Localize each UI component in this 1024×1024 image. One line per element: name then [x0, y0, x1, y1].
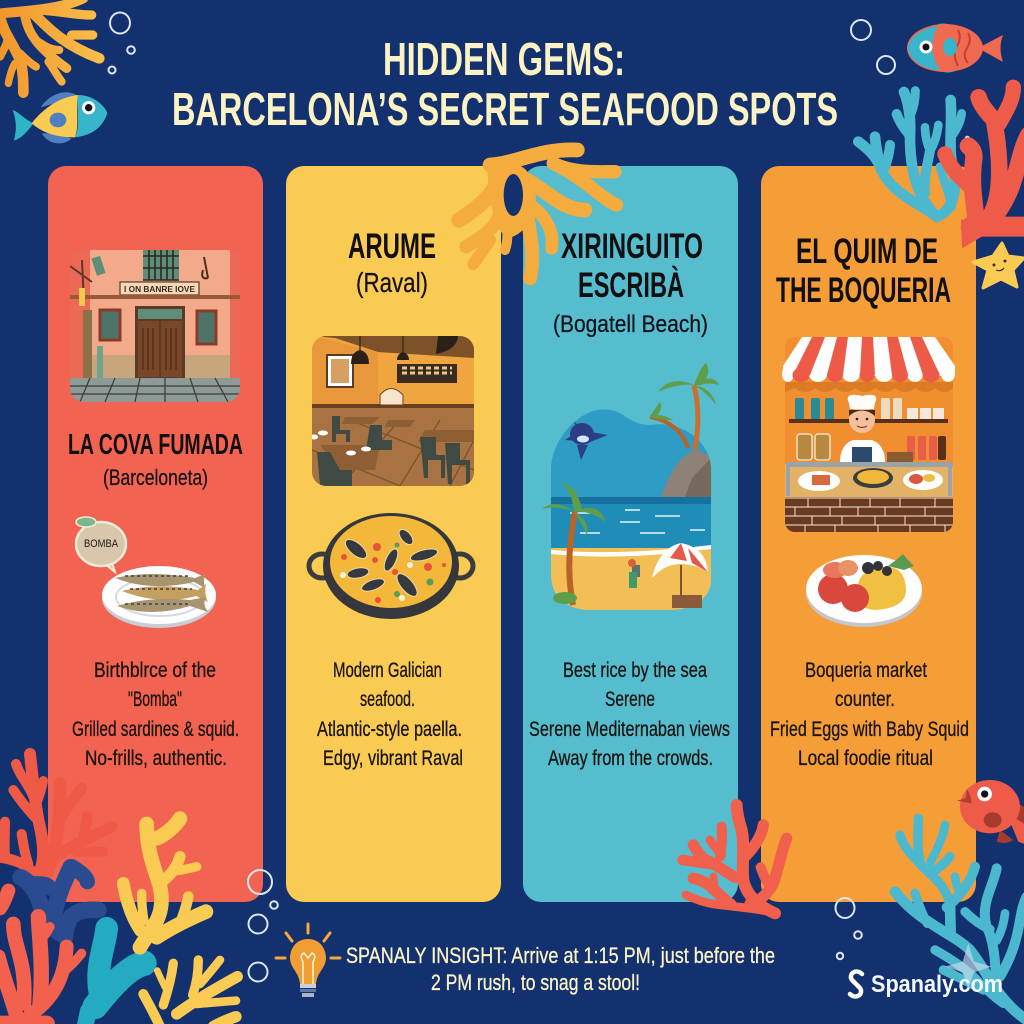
description: Boqueria market	[805, 659, 927, 682]
illustration: tavern facade: I ON BANRE IOVE	[124, 285, 196, 294]
fish: teal and red top right	[907, 23, 1003, 73]
description: No-frills, authentic.	[85, 747, 227, 770]
coral: top left orange	[0, 0, 99, 93]
card: Xiringuito Escribà background	[523, 166, 738, 902]
bubbles	[108, 12, 895, 982]
heading: El Quim de the Boqueria: EL QUIM DE	[796, 232, 938, 271]
description: Birthblrce of the	[94, 659, 216, 682]
card: La Cova Fumada background	[48, 166, 263, 902]
description: Atlantic-style paella.	[317, 718, 462, 741]
description	[529, 659, 730, 770]
insight callout: SPANALY INSIGHT: Arrive at 1:15 PM, just before the	[346, 943, 775, 968]
location: Bogatell Beach: (Bogatell Beach)	[553, 311, 708, 338]
illustration: tavern facade	[70, 250, 240, 402]
description: Edgy, vibrant Raval	[323, 747, 463, 770]
heading: La Cova Fumada: LA COVA FUMADA	[68, 429, 243, 461]
icon: star	[973, 243, 1024, 288]
title	[172, 33, 838, 135]
description: seafood.	[360, 688, 415, 711]
description: Serene	[605, 688, 655, 711]
illustration: beach scene	[542, 363, 719, 610]
coral: lower left teal	[85, 928, 144, 1024]
description	[72, 659, 239, 770]
heading: Xiringuito Escribà	[561, 227, 703, 305]
description: "Bomba"	[128, 688, 182, 711]
callout: Bomba: BOMBA	[84, 538, 119, 550]
description: Best rice by the sea	[563, 659, 707, 682]
description: counter.	[835, 688, 895, 711]
description: Serene Mediternaban views	[529, 718, 730, 741]
description	[317, 659, 463, 770]
icon: light bulb	[276, 924, 340, 997]
description: Local foodie ritual	[798, 747, 933, 770]
panel: El Quim de the Boqueria	[770, 232, 969, 770]
callout: Bomba	[76, 517, 126, 572]
coral: center bottom red	[683, 805, 787, 913]
heading: El Quim de the Boqueria	[776, 232, 951, 310]
coral: lower right blue	[895, 818, 1024, 1020]
heading: Xiringuito Escribà: XIRINGUITO	[561, 227, 703, 266]
coral: bottom yellow	[143, 960, 237, 1024]
description: Away from the crowds.	[548, 747, 713, 770]
icon: sardine plate	[102, 566, 216, 628]
description	[770, 659, 969, 770]
location: Barceloneta: (Barceloneta)	[103, 465, 208, 490]
description: Modern Galician	[333, 659, 442, 682]
coral: top right blue	[858, 91, 967, 217]
icon: paella pan	[309, 513, 473, 619]
coral: lower left yellow	[123, 819, 206, 947]
coral: lower left red front	[0, 891, 82, 1024]
description: Grilled sardines & squid.	[72, 718, 239, 741]
coral: center orange across cards	[459, 150, 617, 278]
heading: Xiringuito Escribà: ESCRIBÀ	[578, 265, 684, 305]
location: Raval: (Raval)	[356, 267, 428, 298]
icon: fried eggs plate	[806, 554, 922, 627]
insight callout	[346, 943, 775, 995]
title: HIDDEN GEMS:	[383, 33, 625, 85]
panel: Arume	[309, 227, 474, 770]
heading: Arume: ARUME	[348, 227, 436, 266]
coral: top right red	[945, 87, 1024, 247]
insight callout: 2 PM rush, to snag a stool!	[431, 970, 640, 995]
card: Arume background	[286, 166, 501, 902]
illustration: market stall	[782, 337, 955, 532]
illustration: restaurant interior	[310, 336, 474, 486]
panel: La Cova Fumada	[68, 250, 243, 770]
fish: red lower right	[957, 780, 1024, 845]
coral: lower left red back	[0, 754, 112, 877]
panel: Xiringuito Escribà	[529, 227, 730, 770]
fish: yellow left	[13, 92, 107, 143]
card: El Quim background	[761, 166, 976, 902]
description: Fried Eggs with Baby Squid	[770, 718, 969, 741]
coral: lower left dark blue	[21, 867, 98, 937]
logo: Spanaly.com: Spanaly.com	[871, 971, 1003, 998]
